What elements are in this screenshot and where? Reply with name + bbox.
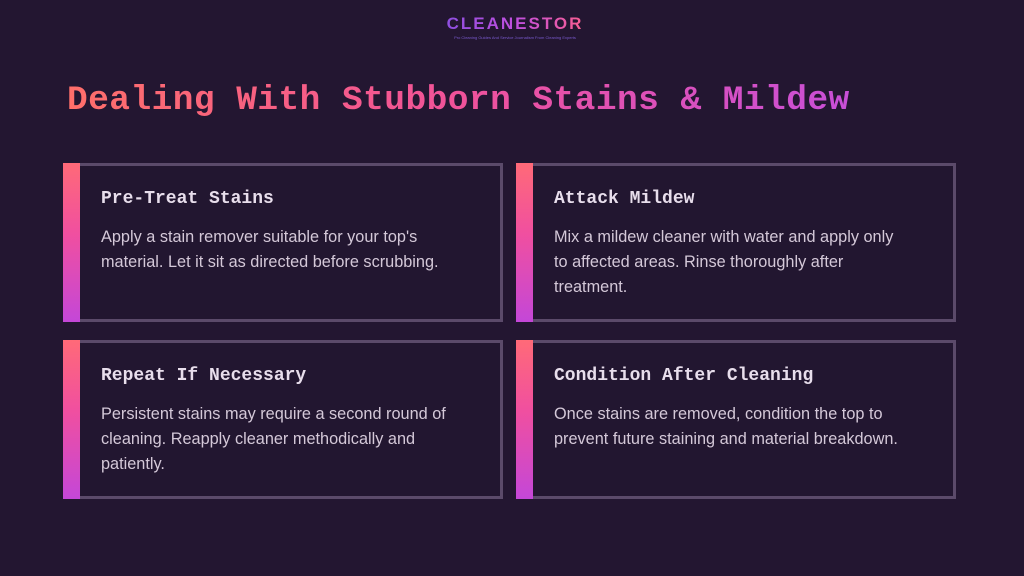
panel: repeat if necessary: Repeat If Necessary [101, 366, 306, 386]
panel: pre-treat stains: material. Let it sit as directed before scrubbing. [101, 253, 439, 271]
panel: repeat if necessary: Persistent stains may require a second round of [101, 405, 446, 423]
panel: condition after cleaning [516, 340, 956, 499]
panel: attack mildew: Mix a mildew cleaner with water and apply only [554, 228, 893, 246]
panel: pre-treat stains: Apply a stain remover suitable for your top's [101, 228, 417, 246]
panel: repeat if necessary [63, 340, 503, 499]
panel: attack mildew [516, 163, 956, 322]
panel: repeat if necessary: patiently. [101, 455, 165, 473]
panel: pre-treat stains: Pre-Treat Stains [101, 189, 274, 209]
panel: pre-treat stains [63, 163, 503, 322]
panel: attack mildew: Attack Mildew [554, 189, 694, 209]
panel: repeat if necessary: cleaning. Reapply cleaner methodically and [101, 430, 415, 448]
panel: condition after cleaning: prevent future staining and material breakdown. [554, 430, 898, 448]
panel: attack mildew: to affected areas. Rinse thoroughly after [554, 253, 843, 271]
logo: Pro Cleaning Guides And Service Journalism From Cleaning Experts [454, 35, 576, 40]
panel: condition after cleaning: Condition After Cleaning [554, 366, 813, 386]
panel: condition after cleaning: Once stains are removed, condition the top to [554, 405, 883, 423]
logo: CLEANESTOR [447, 14, 583, 33]
panel: attack mildew: treatment. [554, 278, 627, 296]
title: Dealing With Stubborn Stains & Mildew [67, 81, 850, 120]
